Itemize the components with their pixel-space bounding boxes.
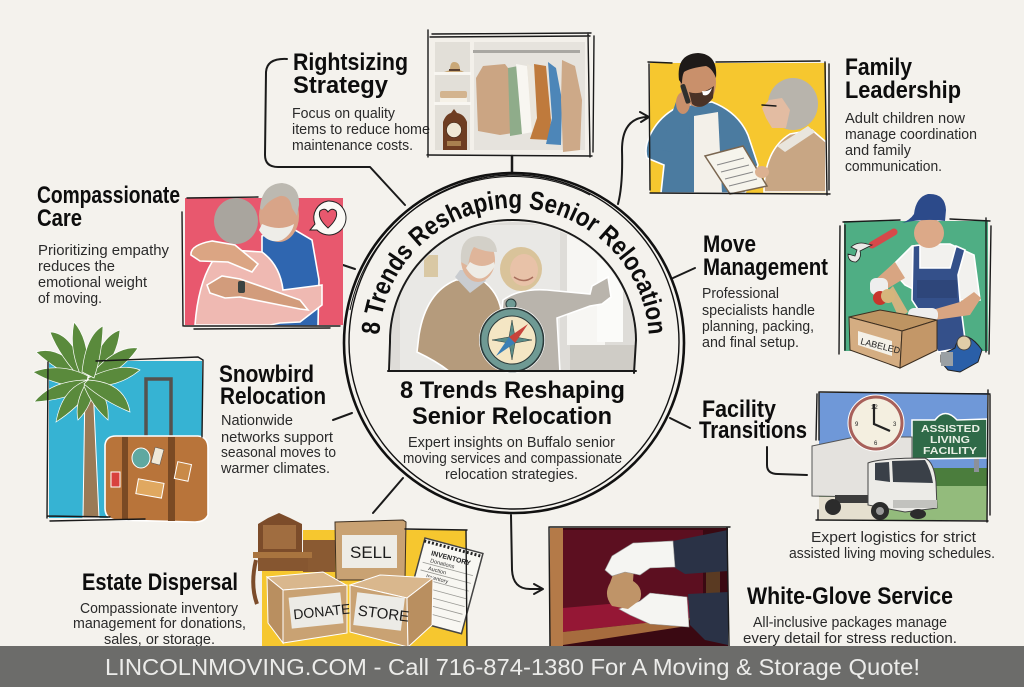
illustration: truck, clock, facility sign [812,393,987,520]
description: reduces the [38,259,115,275]
description: maintenance costs. [292,138,413,154]
sketch frame [648,61,830,195]
palm trunk [83,385,99,518]
description [702,286,815,351]
sketch frame [405,529,467,648]
heading [699,396,807,444]
description: Compassionate inventory [80,601,239,617]
senior parent [764,130,826,192]
description: communication. [845,159,942,175]
son [646,102,758,193]
description [845,111,977,175]
hub arc guide [379,208,649,343]
hub curved title: 8 Trends Reshaping Senior Relocation [362,191,662,334]
sketch frame [47,357,203,521]
connector: white-glove arrow [511,515,543,594]
description: planning, packing, [702,319,814,335]
heading: Management [703,254,828,281]
description [292,106,430,154]
clock: 12 [871,405,878,411]
suitcase handle [146,379,171,438]
panel: estate dispersal [73,513,483,648]
box: SELL: SELL [350,543,392,562]
compass icon [479,299,545,373]
man shirt [262,227,319,326]
description: and final setup. [702,335,799,351]
illustration: boxes, antique desk, inventory pad [253,513,483,647]
perfume bottle [607,568,641,609]
heading: Care [37,205,82,232]
lower glove [619,593,689,627]
heading: Estate Dispersal [82,569,238,596]
illustration: son with senior parent and clipboard [646,53,826,194]
description [38,243,170,307]
clock: 6 [874,441,878,447]
facility sign [912,414,987,459]
description: seasonal moves to [221,445,336,461]
description [73,601,246,648]
connector: closet to hub [511,156,513,172]
antique desk [253,513,335,604]
heading: Relocation [220,383,326,410]
inventory notepad [404,538,483,634]
heading [703,231,828,281]
hub main title [400,377,625,430]
clock [848,395,904,451]
facility sign: LIVING [930,434,970,446]
hub main title: 8 Trends Reshaping [400,377,625,404]
box: STORE [350,575,433,647]
description: Adult children now [845,111,966,127]
connector: hub to family leadership arrow [618,112,649,204]
description: sales, or storage. [104,632,215,648]
hanging clothes [476,64,513,135]
heading: Compassionate [37,182,180,209]
stickers [132,448,150,468]
hub subtitle: Expert insights on Buffalo senior [408,435,615,451]
panel: compassionate care [37,182,346,329]
description: every detail for stress reduction. [743,631,957,647]
closet sketch frame [427,30,594,157]
facility sign: ASSISTED [921,423,980,435]
footer text: LINCOLNMOVING.COM - Call 716-874-1380 For A Moving & Storage Quote! [105,654,920,680]
description: assisted living moving schedules. [789,546,995,562]
mover overalls [912,245,966,352]
woman [495,277,611,372]
description [220,413,336,477]
box: DONATE [267,572,351,643]
connector: facility transitions [670,418,690,428]
description: manage coordination [845,127,977,143]
inventory notepad: INVENTORY [430,550,471,568]
connector: rightsizing to hub [265,59,405,205]
description: Expert logistics for strict [811,530,976,546]
description: management for donations, [73,616,246,632]
labeled box [849,310,937,331]
man upper arm [191,241,258,272]
hub subtitle: moving services and compassionate [403,451,622,467]
footer banner [0,646,1024,687]
man lower arm [207,276,308,310]
connector: move management [673,268,695,278]
tape [887,286,908,318]
description [789,530,995,562]
parent hand [755,166,769,178]
heading: Family [845,54,913,81]
tape dispenser [941,337,982,372]
clock: 3 [893,422,897,428]
description: networks support [221,430,333,446]
heading: Transitions [699,417,807,444]
sketch frame [816,390,990,522]
connector: estate dispersal [373,478,403,513]
panel: snowbird relocation [33,322,336,522]
box: DONATE: DONATE [292,600,351,622]
hub photo: seniors with compass [385,215,640,375]
heading: Rightsizing [293,49,408,76]
mover head and cap [914,218,944,248]
panel: white-glove service [549,527,957,648]
heading: Snowbird [219,361,314,388]
hub subtitle [403,435,622,483]
woman hair [214,198,258,244]
illustration: seniors hugging [185,183,346,326]
sketch frame [549,527,730,648]
dome outline and base line [388,220,636,373]
upper glove [605,541,675,576]
inventory notepad: Auction [427,566,447,577]
description: emotional weight [38,275,147,291]
description: specialists handle [702,303,815,319]
connector [767,447,807,475]
clipboard [705,146,767,194]
sketch frame [839,218,991,354]
description: warmer climates. [220,461,330,477]
heart speech bubble [310,201,346,235]
inventory notepad: Inventory [425,574,449,585]
description [743,615,957,647]
illustration: mover packing box: LABELED [860,336,902,356]
inventory notepad: Donations [429,558,455,571]
description: Nationwide [221,413,293,429]
hub subtitle: relocation strategies. [445,467,578,483]
hub rings [344,173,684,513]
heading [293,49,408,99]
panel: move management [702,194,991,372]
clock: 9 [855,422,859,428]
mover arms [875,262,905,292]
box: STORE: STORE [357,602,410,626]
description: Professional [702,286,779,302]
heading [219,361,326,410]
central hub [342,172,686,514]
hat [444,62,464,72]
truck [812,437,937,520]
facility sign: FACILITY [923,445,977,457]
description: All-inclusive packages manage [753,615,947,631]
suitcase [105,436,208,522]
panel: rightsizing strategy [292,30,594,157]
heading [845,54,961,104]
closet illustration [430,36,590,154]
wrench [848,232,894,262]
man head [259,190,299,242]
mantel clock [443,109,467,150]
sleeves [672,530,728,574]
description: of moving. [38,291,102,307]
description: and family [845,143,912,159]
box: SELL [335,520,406,580]
mover shirt [890,244,980,300]
heading: Leadership [845,77,961,104]
illustration: gloved hands with perfume in cabinet [550,528,728,647]
folded clothes [440,91,467,98]
connector: snowbird relocation [333,413,352,420]
description: Focus on quality [292,106,396,122]
heading: White-Glove Service [747,583,953,610]
sketch frame [182,197,340,329]
gloves [870,278,888,295]
panel: family leadership [646,53,977,195]
heading: Move [703,231,756,258]
description: items to reduce home [292,122,430,138]
hub main title: Senior Relocation [412,403,612,430]
illustration: palm tree and suitcase [33,322,208,522]
illustration: mover packing box [844,194,988,372]
heading [37,182,180,232]
man [417,280,505,372]
heading: Strategy [293,72,389,99]
palm fronds [33,322,140,422]
panel: facility transitions [699,390,995,562]
connector: compassionate care [343,265,355,269]
woman body [195,250,322,325]
description: Prioritizing empathy [38,243,170,259]
heading: Facility [702,396,777,423]
